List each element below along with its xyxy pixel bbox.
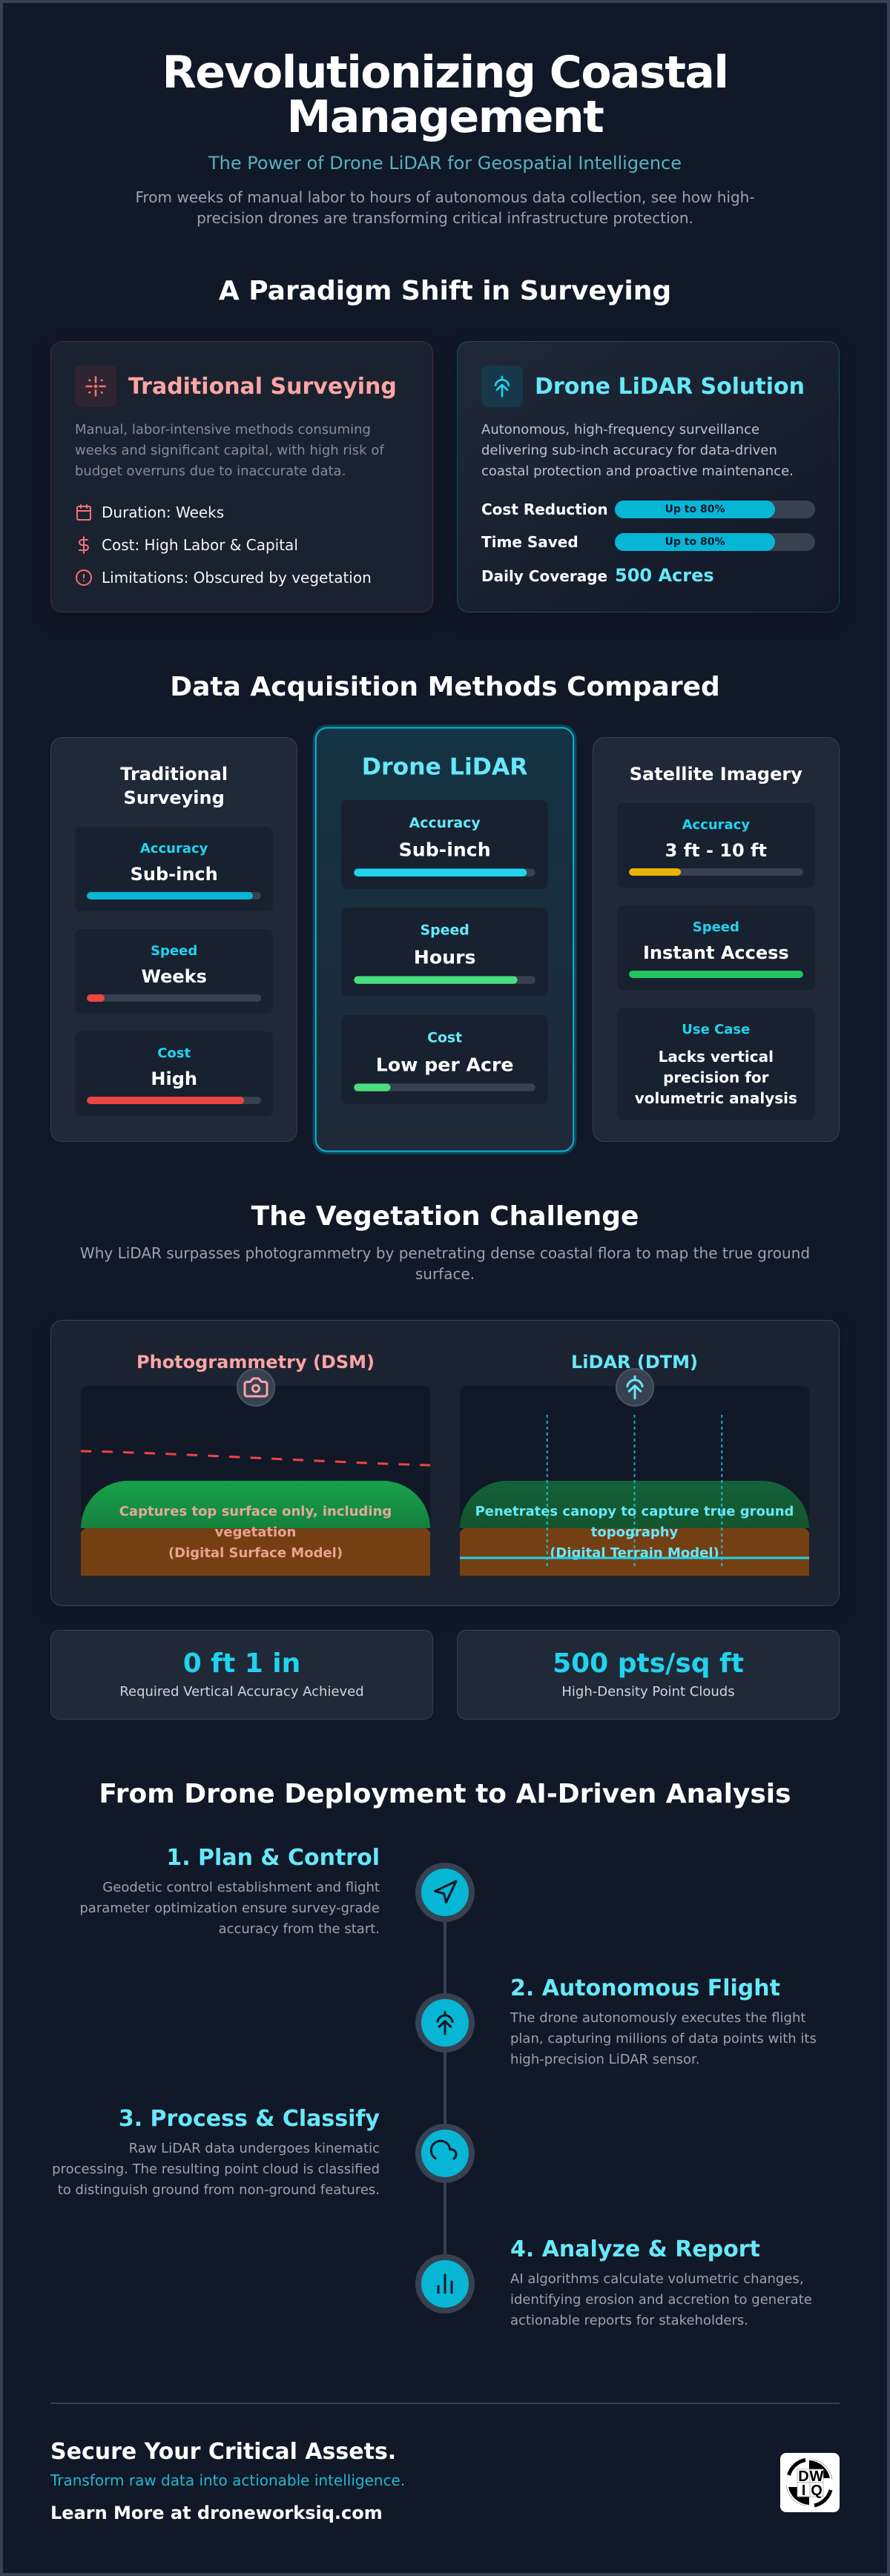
metric: speed: Instant Access [643,942,789,963]
metric: cost: Cost [427,1030,463,1046]
title [162,47,728,143]
metric: accuracy [342,800,548,889]
icon: alert [76,569,92,586]
step 1 text: parameter optimization ensure survey-grade [79,1900,380,1916]
metric: accuracy: Sub-inch [399,839,491,861]
intro text: precision drones are transforming critical infrastructure protection. [197,209,693,227]
time saved label: Time Saved [481,533,578,551]
panel: satellite imagery column [593,737,840,1142]
step 3 text [52,2106,380,2198]
metric: speed [75,929,273,1014]
panel: vegetation comparison [50,1320,840,1606]
logo [780,2453,840,2512]
icon: dollar [79,536,89,554]
diagram caption: Captures top surface only, including [119,1504,392,1519]
metric: speed: Speed [421,922,469,939]
metric: cost [75,1031,273,1116]
intro text: From weeks of manual labor to hours of autonomous data collection, see how high- [135,188,755,206]
column: photogrammetry [81,1352,430,1576]
card description: Manual, labor-intensive methods consuming [75,422,371,437]
column: lidar [460,1352,809,1576]
card description [75,422,384,479]
metric: cost: High [151,1069,197,1089]
card description: coastal protection and proactive maintenance. [481,463,794,479]
footer tagline: Transform raw data into actionable intelligence. [50,2471,405,2489]
metric: accuracy: Accuracy [140,841,208,856]
icon: cloud [415,2124,475,2183]
metric: use case: volumetric analysis [635,1089,797,1107]
metric: speed [342,908,548,997]
heading: methods compared: Data Acquisition Methods Compared [170,672,720,702]
metric: speed [617,905,815,990]
dashed surface line [81,1450,430,1467]
step 1 text: accuracy from the start. [219,1921,380,1937]
step 1 text: 1. Plan & Control [166,1845,380,1871]
daily coverage label: Daily Coverage [481,567,607,585]
logo: W [810,2468,824,2485]
metric: cost [342,1015,548,1104]
card description: weeks and significant capital, with high risk of [75,443,384,458]
column heading [120,764,228,808]
icon: navigation [415,1863,475,1922]
heading: vegetation challenge: The Vegetation Challenge [251,1201,639,1232]
step 2 text: 2. Autonomous Flight [510,1975,780,2001]
diagram caption: Penetrates canopy to capture true ground [475,1504,794,1519]
icon: camera [236,1368,274,1407]
step 4 text: 4. Analyze & Report [510,2236,760,2262]
step 4 text: identifying erosion and accretion to generate [510,2292,812,2308]
panel: drone lidar solution [457,341,840,612]
metric: use case: Lacks vertical [659,1048,774,1066]
panel: traditional surveying [50,341,433,612]
daily coverage value: 500 Acres [615,565,714,586]
icon: crosshair [75,366,116,407]
metric: cost: Low per Acre [376,1054,514,1076]
title: Revolutionizing Coastal [162,47,728,99]
heading: workflow: From Drone Deployment to AI-Driven Analysis [99,1779,791,1809]
panel: traditional surveying column [50,737,297,1142]
step 3 text: processing. The resulting point cloud is classified [52,2161,380,2177]
metric: accuracy: Accuracy [682,817,750,833]
stat label: High-Density Point Clouds [561,1684,735,1700]
logo: I [802,2483,805,2499]
diagram title: Photogrammetry (DSM) [136,1352,375,1373]
icon: lidar [616,1368,654,1407]
step 4 text [510,2236,812,2328]
metric: use case: Use Case [682,1022,750,1037]
step 3 text: 3. Process & Classify [119,2106,380,2132]
vegetation canopy [81,1481,430,1528]
card description: Autonomous, high-frequency surveillance [481,422,759,437]
metric: accuracy [617,803,815,888]
step 4 text: AI algorithms calculate volumetric changes, [510,2271,804,2287]
step 1 text: Geodetic control establishment and flight [102,1880,380,1895]
diagram caption [119,1504,392,1561]
footer link: Learn More at droneworksiq.com [50,2503,383,2523]
stat: point density [457,1630,840,1720]
step 2 text: plan, capturing millions of data points with its [510,2031,817,2047]
icon: bar chart [415,2254,475,2314]
metric: accuracy [75,827,273,911]
metric: speed: Speed [151,943,197,959]
metric: speed: Hours [414,946,476,968]
stat: vertical accuracy [50,1630,433,1720]
metric: speed: Weeks [141,966,207,987]
vegetation subtitle: Why LiDAR surpasses photogrammetry by penetrating dense coastal flora to map the true ground [80,1244,810,1262]
step 4 text: actionable reports for stakeholders. [510,2313,748,2328]
metric: speed: Speed [693,919,739,935]
time saved bar: Up to 80% [665,536,725,548]
diagram: lidar [460,1386,809,1576]
subtitle: The Power of Drone LiDAR for Geospatial Intelligence [208,153,682,174]
icon: calendar [76,504,91,521]
metric: accuracy: Accuracy [409,815,481,831]
metric: cost: Cost [157,1046,191,1061]
cost reduction label: Cost Reduction [481,501,608,518]
metric: accuracy: Sub-inch [131,864,218,885]
card heading: Drone LiDAR Solution [535,374,805,400]
card description [481,422,794,479]
stat label: Required Vertical Accuracy Achieved [119,1684,364,1700]
timeline connector [444,1892,446,2284]
card description: budget overruns due to inaccurate data. [75,463,346,479]
ground layer [460,1528,809,1576]
metric: use case [617,1008,815,1120]
vegetation subtitle [80,1244,810,1283]
cost reduction bar: Up to 80% [665,503,725,515]
diagram title: LiDAR (DTM) [571,1352,698,1373]
lidar pulses and ground line [460,1415,809,1566]
diagram caption [475,1504,794,1561]
column heading: Surveying [124,787,225,808]
icon: lidar [415,1993,475,2052]
diagram caption: topography [591,1525,678,1540]
metric: accuracy: 3 ft - 10 ft [665,840,767,861]
stat value: 0 ft 1 in [183,1648,300,1679]
step 2 text: high-precision LiDAR sensor. [510,2052,700,2067]
vegetation canopy [460,1481,809,1528]
card description: delivering sub-inch accuracy for data-driven [481,443,777,458]
stat value: 500 pts/sq ft [553,1648,744,1679]
step 3 text: Raw LiDAR data undergoes kinematic [129,2141,380,2156]
step 3 text: to distinguish ground from non-ground features. [58,2182,380,2198]
vegetation subtitle: surface. [415,1265,475,1283]
card heading: Traditional Surveying [128,374,397,400]
step 1 text [79,1845,380,1937]
diagram caption: vegetation [215,1525,296,1540]
icon: lidar [481,366,523,407]
limitations item: Limitations: Obscured by vegetation [102,569,372,587]
heading: paradigm shift: A Paradigm Shift in Surveying [219,276,671,306]
logo: D [798,2468,809,2485]
step 2 text: The drone autonomously executes the flight [510,2010,805,2026]
footer headline: Secure Your Critical Assets. [50,2439,396,2465]
metric: use case: precision for [663,1069,769,1086]
ground layer [81,1528,430,1576]
duration item: Duration: Weeks [102,503,224,521]
panel: drone lidar column [315,727,575,1152]
cost reduction bar [615,501,815,518]
diagram caption: (Digital Terrain Model) [550,1545,719,1561]
column heading: Satellite Imagery [630,764,802,785]
intro text [135,188,755,227]
column heading: Drone LiDAR [362,753,528,781]
title: Management [287,91,603,143]
logo: Q [811,2483,823,2499]
column heading: Traditional [120,764,228,785]
cost item: Cost: High Labor & Capital [102,536,298,554]
diagram caption: (Digital Surface Model) [168,1545,343,1561]
step 2 text [510,1975,817,2067]
diagram: photogrammetry [81,1386,430,1576]
time saved bar [615,533,815,551]
